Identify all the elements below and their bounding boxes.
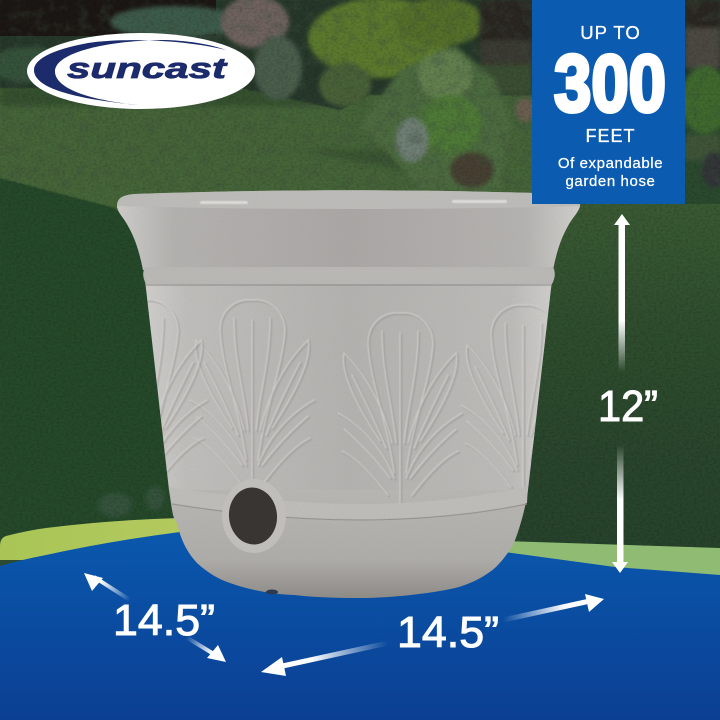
label: 14.5 inches: 14.5” bbox=[113, 596, 215, 645]
swoosh base: green and blue ground bbox=[0, 518, 720, 720]
shaded lawn left bbox=[0, 178, 170, 540]
product: hose pot bbox=[83, 189, 586, 599]
drain notch bbox=[266, 590, 278, 594]
lawn: back shadow strip bbox=[0, 86, 330, 106]
lower band bbox=[169, 486, 528, 520]
grass grain bbox=[0, 0, 720, 560]
arrow: up bbox=[614, 214, 630, 372]
flared rim bbox=[117, 190, 580, 270]
arrow: up-left bbox=[84, 573, 130, 600]
upper band bbox=[143, 267, 555, 285]
depth dimension: left 14.5 inches bbox=[84, 573, 226, 662]
callout number: 300: 300 bbox=[554, 39, 666, 129]
right side shrubs bbox=[681, 0, 720, 188]
green band right bbox=[505, 541, 720, 580]
panel: 300 feet callout: garden hose bbox=[565, 173, 656, 190]
embossed leaf pattern bbox=[147, 299, 548, 503]
callout text: feet: FEET bbox=[585, 126, 636, 146]
small leaves on lawn bbox=[98, 486, 164, 517]
arrow: down bbox=[612, 445, 628, 573]
shaded lawn right bbox=[520, 204, 720, 549]
width dimension: right 14.5 inches bbox=[261, 594, 604, 676]
logo swoosh bbox=[34, 40, 226, 106]
logo: suncast bbox=[27, 33, 255, 109]
rim lip bbox=[117, 190, 580, 209]
green band left bbox=[0, 518, 180, 570]
callout text: description: Of expandable bbox=[558, 155, 663, 172]
pot bowl bbox=[169, 490, 528, 598]
rim highlights bbox=[200, 200, 507, 276]
hose hole bbox=[222, 479, 286, 553]
lawn: plant shadow bbox=[300, 150, 500, 180]
panel: 300 feet callout bbox=[532, 0, 685, 204]
grain on pot bbox=[156, 201, 548, 439]
leaf texture bbox=[0, 0, 720, 190]
arrow: right bbox=[503, 594, 604, 620]
lawn: sunlit area bbox=[0, 84, 532, 260]
foreground leafy plant bbox=[360, 45, 535, 190]
label: 14.5 inches: 14.5” bbox=[397, 608, 499, 657]
arrow: left bbox=[261, 643, 388, 676]
label: 12 inches: 12” bbox=[598, 382, 658, 431]
height dimension: 12 inches bbox=[598, 214, 658, 573]
pot body bbox=[145, 280, 552, 490]
logo wordmark: suncast bbox=[67, 53, 228, 85]
arrow: down-right bbox=[186, 637, 226, 662]
garden bed and fence bbox=[0, 0, 720, 110]
callout text: up to: UP TO bbox=[580, 22, 641, 43]
blue ground bbox=[0, 532, 720, 720]
